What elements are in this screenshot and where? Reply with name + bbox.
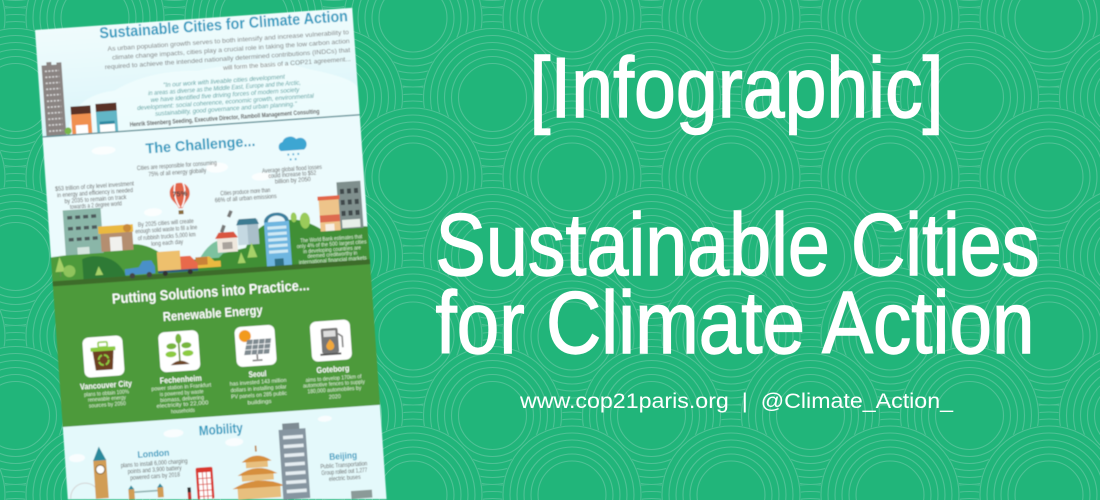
text block: flood losses: could increase to $52 [268, 171, 317, 180]
text block: vancouver city: plans to obtain 100% [84, 389, 129, 398]
text block: quote: in areas as diverse as the Middle East, Europe and the Arctic, [148, 81, 301, 97]
text block: quote: sustainability, good governance and urban planning." [155, 102, 298, 118]
heading: renewable energy: Renewable Energy [162, 303, 263, 324]
text block: world bank: deemed creditworthy in [307, 251, 358, 260]
icon: grey tower [41, 61, 66, 136]
text block: fechenheim: is powered by waste [160, 389, 204, 398]
text block: world bank: The World Bank estimates that [300, 234, 363, 245]
heading: putting solutions into practice: Putting Solutions into Practice... [111, 277, 310, 308]
text block: fechenheim [151, 373, 214, 417]
icon: hot air balloon: 75% [172, 189, 188, 199]
panel: solutions section [53, 264, 380, 428]
text block: investment: $53 trillion of city level investment [55, 181, 135, 193]
heading: the challenge: The Challenge... [145, 133, 256, 158]
text block: intro: will form the basis of a COP21 agreement... [222, 56, 351, 72]
icon: phone box [195, 467, 215, 500]
text block: intro [103, 29, 351, 80]
text block: fechenheim: Fechenheim [159, 374, 202, 386]
icon: guard [187, 487, 192, 499]
text block: london: points and 3,900 battery [127, 466, 182, 476]
text block: london [120, 446, 189, 483]
icon: grey blue building [236, 218, 260, 245]
text block: investment: by 2035 to remain on track [64, 195, 128, 205]
text block: goteborg: 180,000 automobiles by [307, 386, 362, 395]
text block: intro: climate change impacts, cities play a crucial role in taking the low carbon action [112, 38, 350, 62]
icon: solar panel [234, 325, 277, 367]
text block: london: London [137, 448, 170, 460]
text block: beijing: Group rolled out 1,277 [321, 468, 368, 477]
text block: goteborg: automotive fences to supply [303, 379, 365, 390]
text block: beijing: electric buses [329, 475, 361, 483]
text block: emissions: Cities produce more than [220, 188, 271, 197]
icon: orange house [63, 105, 92, 135]
panel: mobility section [63, 405, 387, 500]
text block: seoul: Seoul [248, 369, 267, 379]
text block: quote: development: social coherence, economic growth, environmental [137, 94, 315, 112]
text block: solid waste: long each day [151, 240, 183, 248]
text block: vancouver city: Vancouver City [80, 379, 133, 392]
panel: tilted infographic poster [35, 8, 387, 500]
text block: solid waste [135, 219, 199, 249]
text block: flood losses: Average global flood losses [262, 165, 322, 175]
icon: trees on right hill [290, 211, 311, 230]
icon: grey building bottom right [351, 490, 372, 499]
icon: trucks [124, 248, 221, 279]
icon: hot air balloon [169, 182, 191, 215]
text block: energy: Cities are responsible for consuming [137, 161, 217, 172]
text block: fechenheim: households [171, 408, 195, 415]
text block: investment [55, 181, 136, 212]
icon: fuel pump [310, 319, 352, 362]
icon: left office building [63, 208, 104, 255]
text block: fechenheim: electricity to 22,000 [156, 400, 209, 410]
text block: emissions: 66% of all urban emissions [215, 194, 277, 204]
icon: big ben and london eye [67, 446, 109, 500]
text block: world bank: only 4% of the 500 largest cities [297, 239, 367, 250]
text block: beijing: Beijing [329, 450, 357, 462]
text block: vancouver city: sources by 2050 [89, 401, 126, 410]
text block: quote [127, 72, 320, 129]
text block: solid waste: of rubbish trucks 5,000 km [138, 232, 196, 242]
text block: quote: "In our work with liveable cities development [163, 75, 285, 89]
icon: light blue tall building [263, 212, 292, 267]
icon: rain cloud [278, 136, 308, 161]
text block: fechenheim: power station in Frankfurt [151, 383, 212, 393]
text block: seoul: PV panels on 285 public [231, 391, 287, 401]
text block: flood losses [262, 165, 323, 186]
text block: solid waste: By 2025 cities will create [138, 219, 195, 229]
text block: quote: we have identified five driving forces of modern society [151, 88, 301, 104]
text block: solid waste: enough solid waste to fill a line [135, 225, 198, 235]
text block: beijing: Public Transportation [320, 461, 368, 471]
heading: main title: Sustainable Cities for Climate Action [99, 8, 348, 42]
text block: goteborg: 2020 [329, 394, 341, 401]
icon: trees left [54, 242, 258, 278]
icon: teal house [95, 103, 118, 133]
icon: recycling bin [82, 335, 125, 378]
text block: goteborg: Goteborg [316, 364, 350, 375]
hills [49, 214, 370, 285]
text block: emissions [214, 188, 277, 204]
icon: burger shop [98, 224, 135, 252]
heading: infographic tag: [Infographic] [530, 41, 944, 136]
text block: seoul: dollars in installing solar [230, 384, 287, 394]
icon: temple of heaven [230, 444, 286, 500]
text block: goteborg: aims to develop 170km of [305, 374, 362, 384]
text block: flood losses: billion by 2050 [275, 177, 312, 186]
icon: right buildings [316, 181, 364, 232]
text block: investment: towards a 2 degree world [70, 201, 122, 211]
text block: energy: 75% of all energy globally [148, 168, 206, 178]
text block: vancouver city [80, 379, 134, 410]
panel: header section [35, 8, 360, 138]
icon: tower bridge [128, 483, 164, 500]
text block: quote: Henrik Steenberg Seeding, Executive Director, Ramboll Management Consulting [130, 109, 320, 129]
text block: seoul: has invested 143 million [230, 378, 287, 388]
text block: london: plans to install 6,000 charging [121, 459, 188, 470]
panel: the challenge section [43, 116, 370, 286]
text block: seoul [229, 368, 288, 408]
text block: world bank: in developing countries are [303, 245, 361, 255]
text block: london: powered cars by 2018 [130, 472, 181, 482]
text block: world bank: international financial markets [299, 255, 367, 266]
icon: seedling [158, 330, 201, 373]
heading: mobility: Mobility [198, 420, 244, 439]
icon: factory smoke and red roof house [213, 210, 239, 253]
text block: world bank [296, 234, 368, 266]
icon: grey tower block [278, 422, 310, 500]
text block: investment: in energy and efficiency is needed [57, 188, 133, 199]
text block: fechenheim: biomass, delivering [160, 395, 204, 404]
text block: intro: required to achieve the intended nationally determined contributions (INDCs) that [105, 47, 351, 71]
text block: website and handle: www.cop21paris.org | @Climate_Action_ [519, 390, 953, 413]
text block: beijing [319, 449, 368, 484]
text block: energy [137, 161, 217, 179]
text block: intro: As urban population growth serves to both intensify and increase vulnerability to [107, 29, 349, 53]
text block: vancouver city: renewable energy [88, 395, 126, 404]
text block: seoul: buildings [247, 399, 272, 407]
text block: goteborg [302, 363, 366, 403]
